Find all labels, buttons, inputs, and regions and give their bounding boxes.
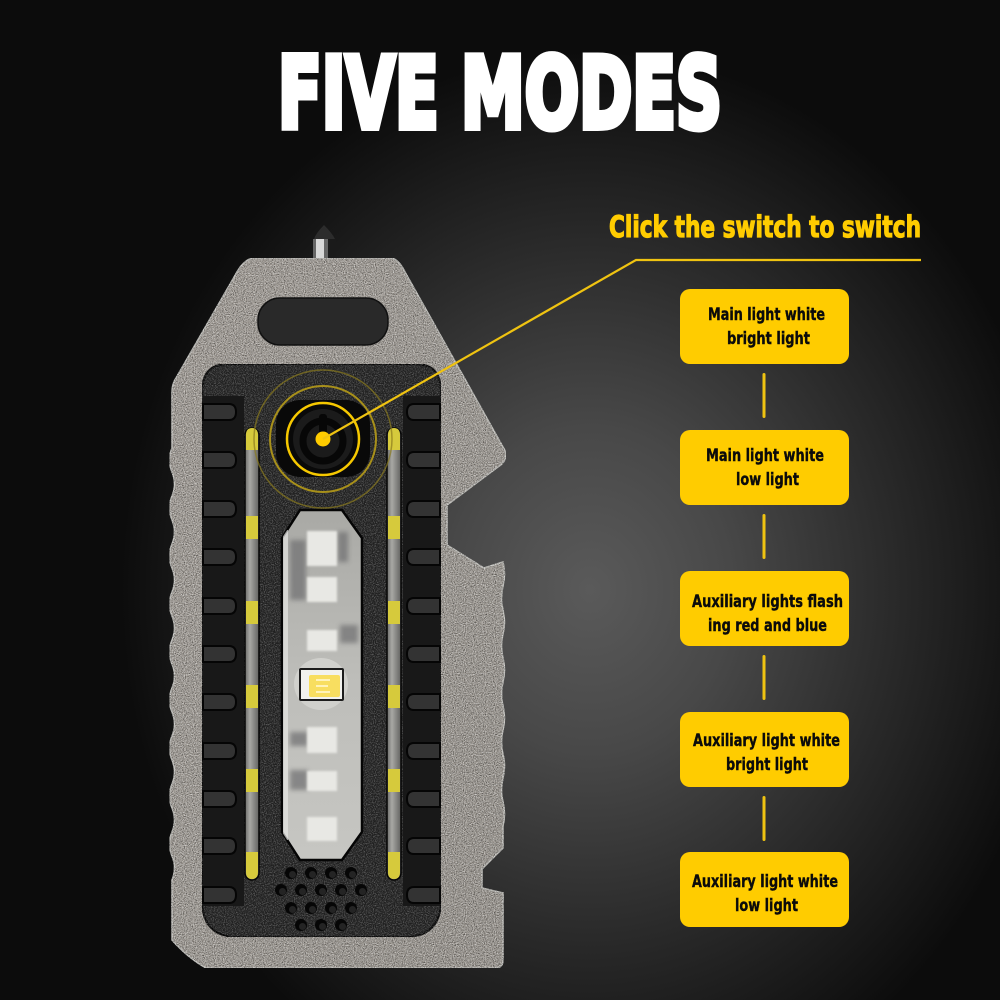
connector 2 bbox=[762, 514, 766, 559]
connector 3 bbox=[762, 655, 766, 700]
mode box 2 bbox=[680, 430, 849, 505]
connector 1 bbox=[762, 373, 766, 418]
mode box 2: low light bbox=[736, 470, 799, 489]
mode box 4: Auxiliary light white bbox=[693, 731, 840, 750]
lanyard hole bbox=[258, 298, 388, 345]
mode box 4: bright light bbox=[726, 755, 808, 774]
power switch bbox=[276, 400, 370, 477]
switch callout rings and leader line bbox=[254, 260, 921, 508]
right light strip bbox=[387, 428, 401, 880]
metal body bbox=[170, 258, 506, 968]
title: FIVE MODES bbox=[278, 38, 722, 152]
mode box 5: Auxiliary light white bbox=[692, 872, 838, 891]
product: keychain flashlight bbox=[170, 225, 506, 968]
mode box 4 bbox=[680, 712, 849, 787]
LED chip bbox=[294, 658, 348, 710]
mode box 3: ing red and blue bbox=[708, 616, 827, 635]
mode box 1: bright light bbox=[727, 329, 810, 348]
left light strip bbox=[245, 428, 259, 880]
mode box 3 bbox=[680, 571, 849, 646]
mode box 3: Auxiliary lights flash bbox=[692, 592, 843, 611]
center lens bbox=[282, 510, 362, 860]
mode box 1: Main light white bbox=[708, 305, 825, 324]
connector 4 bbox=[762, 796, 766, 841]
black front plate bbox=[202, 364, 441, 937]
right grip ribs bbox=[407, 404, 440, 903]
dark side columns bbox=[203, 396, 440, 906]
icon: breaker tip bbox=[313, 225, 336, 258]
mode box 1 bbox=[680, 289, 849, 364]
speaker dots bbox=[275, 867, 367, 931]
left grip ribs bbox=[203, 404, 236, 903]
mode box 5 bbox=[680, 852, 849, 927]
mode box 5: low light bbox=[735, 896, 798, 915]
mode box 2: Main light white bbox=[706, 446, 824, 465]
